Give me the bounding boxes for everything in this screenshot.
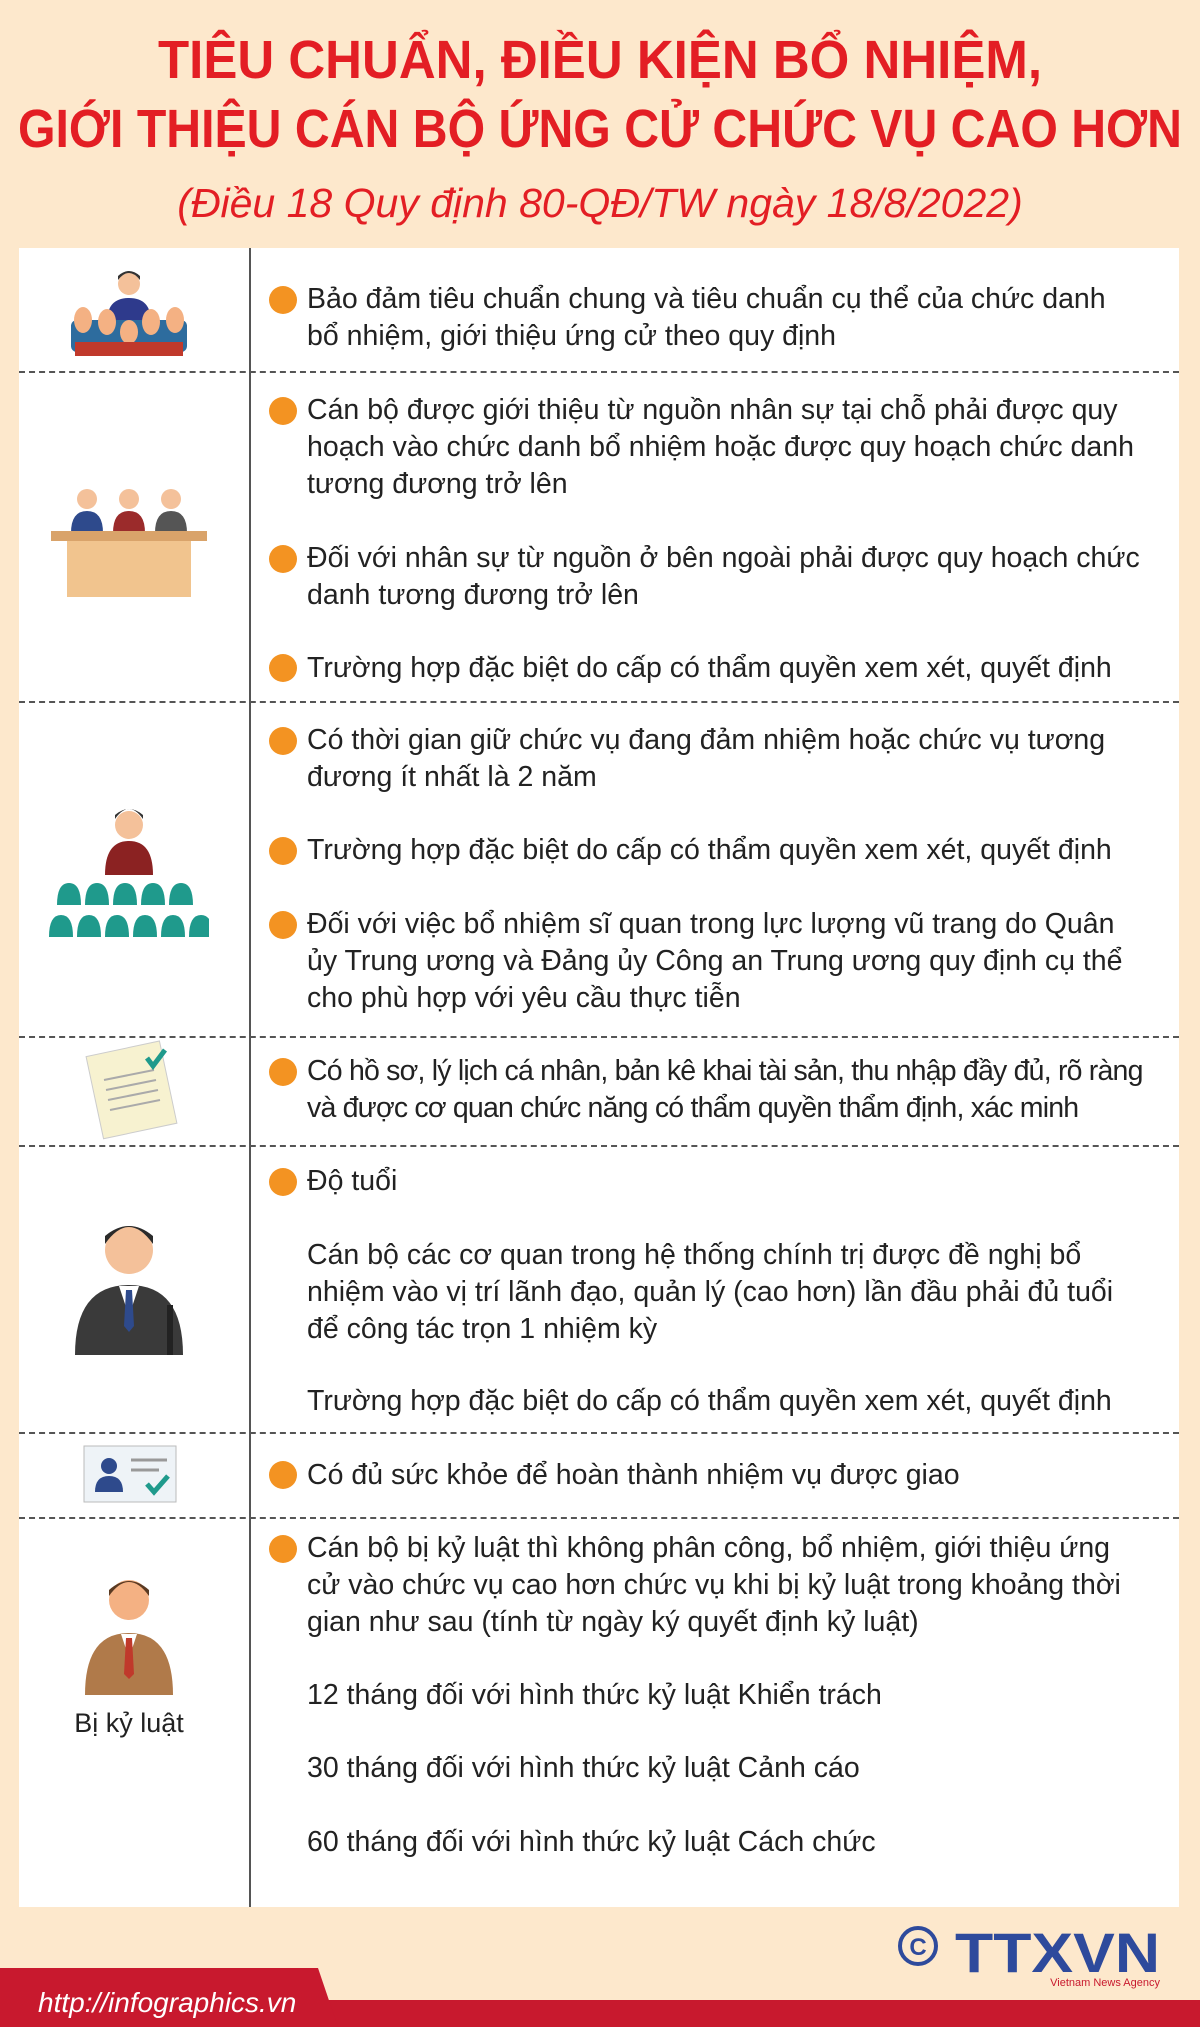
- row 2 text: [269, 397, 297, 425]
- text: Đối với việc bổ nhiệm sĩ quan trong lực lượng vũ trang do Quân: [307, 908, 1114, 940]
- row 5 text: [269, 1168, 297, 1196]
- text: tương đương trở lên: [307, 468, 568, 500]
- text: đương ít nhất là 2 năm: [307, 761, 597, 793]
- icon: document with check: [86, 1040, 178, 1140]
- row 3 text: [269, 727, 297, 755]
- text: Trường hợp đặc biệt do cấp có thẩm quyền xem xét, quyết định: [307, 1385, 1112, 1417]
- icon: panel of three at desk: [51, 489, 207, 597]
- text: Bảo đảm tiêu chuẩn chung và tiêu chuẩn cụ thể của chức danh: [307, 283, 1106, 315]
- text: Có đủ sức khỏe để hoàn thành nhiệm vụ được giao: [307, 1459, 960, 1491]
- row 4 text: [269, 1058, 297, 1086]
- text: Cán bộ các cơ quan trong hệ thống chính trị được đề nghị bổ: [307, 1239, 1081, 1271]
- icon: speaker with audience: [49, 809, 209, 937]
- text: cử vào chức vụ cao hơn chức vụ khi bị kỷ luật trong khoảng thời: [307, 1569, 1121, 1601]
- logo: TTXVN: [898, 1921, 1160, 1989]
- text: Trường hợp đặc biệt do cấp có thẩm quyền xem xét, quyết định: [307, 834, 1112, 866]
- text: Độ tuổi: [307, 1165, 397, 1197]
- logo: TTXVN: Vietnam News Agency: [1050, 1977, 1160, 1989]
- text: nhiệm vào vị trí lãnh đạo, quản lý (cao hơn) lần đầu phải đủ tuổi: [307, 1276, 1113, 1308]
- icon: ID card with check: [84, 1446, 176, 1502]
- logo: TTXVN: TTXVN: [955, 1921, 1160, 1984]
- text: 12 tháng đối với hình thức kỷ luật Khiển trách: [307, 1679, 882, 1711]
- text: 60 tháng đối với hình thức kỷ luật Cách chức: [307, 1826, 876, 1858]
- subtitle: (Điều 18 Quy định 80-QĐ/TW ngày 18/8/2022): [177, 180, 1023, 226]
- icon: disciplined official: [85, 1580, 173, 1695]
- text: Trường hợp đặc biệt do cấp có thẩm quyền xem xét, quyết định: [307, 652, 1112, 684]
- text: hoạch vào chức danh bổ nhiệm hoặc được quy hoạch chức danh: [307, 431, 1134, 463]
- text: Cán bộ bị kỷ luật thì không phân công, bổ nhiệm, giới thiệu ứng: [307, 1532, 1110, 1564]
- footer bar: [0, 2000, 1200, 2027]
- icon: leader with raised hands: [71, 271, 187, 356]
- row 6 text: [269, 1461, 297, 1489]
- title: TIÊU CHUẨN, ĐIỀU KIỆN BỔ NHIỆM,: [158, 29, 1042, 90]
- title: [18, 29, 1182, 159]
- row 1 text: [269, 286, 297, 314]
- text: gian như sau (tính từ ngày ký quyết định kỷ luật): [307, 1606, 919, 1638]
- text: bổ nhiệm, giới thiệu ứng cử theo quy định: [307, 320, 836, 352]
- panel: criteria table: [19, 248, 1179, 1907]
- icon: man at microphone: [75, 1226, 183, 1355]
- text: Cán bộ được giới thiệu từ nguồn nhân sự tại chỗ phải được quy: [307, 394, 1118, 426]
- text: Đối với nhân sự từ nguồn ở bên ngoài phải được quy hoạch chức: [307, 542, 1140, 574]
- row 7 text: [269, 1535, 297, 1563]
- text: danh tương đương trở lên: [307, 579, 639, 611]
- text: cho phù hợp với yêu cầu thực tiễn: [307, 982, 741, 1014]
- text: Có hồ sơ, lý lịch cá nhân, bản kê khai tài sản, thu nhập đầy đủ, rõ ràng: [307, 1055, 1143, 1087]
- text: Có thời gian giữ chức vụ đang đảm nhiệm hoặc chức vụ tương: [307, 724, 1105, 756]
- logo: TTXVN: C: [909, 1934, 927, 1961]
- text: và được cơ quan chức năng có thẩm quyền thẩm định, xác minh: [307, 1092, 1078, 1124]
- footer url tab: http://infographics.vn: [38, 1987, 296, 2018]
- label: Bị kỷ luật: Bị kỷ luật: [74, 1708, 184, 1738]
- footer url tab: [0, 1968, 329, 2018]
- text: 30 tháng đối với hình thức kỷ luật Cảnh cáo: [307, 1752, 860, 1784]
- text: để công tác trọn 1 nhiệm kỳ: [307, 1313, 657, 1345]
- text: ủy Trung ương và Đảng ủy Công an Trung ương quy định cụ thể: [307, 945, 1122, 977]
